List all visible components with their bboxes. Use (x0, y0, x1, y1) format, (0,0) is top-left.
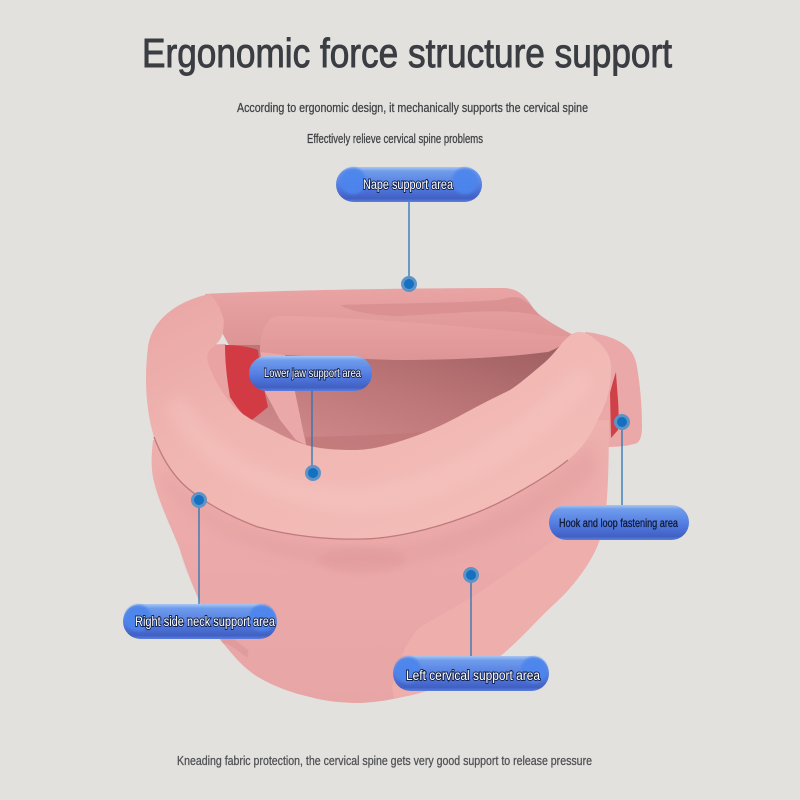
fabric ripple under roll (318, 547, 406, 573)
callout: lower jaw support area: Lower jaw support area (264, 366, 361, 380)
lower body (152, 420, 609, 703)
bottom caption: Kneading fabric protection, the cervical spine gets very good support to release pressure (177, 754, 592, 768)
title: Ergonomic force structure support (142, 30, 673, 76)
right strap with hook and loop (585, 332, 642, 447)
callout: right side neck support area (123, 492, 277, 639)
front roll (146, 294, 611, 539)
left inner wall (200, 344, 280, 440)
roll inner highlight (175, 375, 585, 500)
cavity lower band (306, 432, 423, 452)
inner top strap (260, 316, 570, 360)
inner side strap (260, 350, 306, 445)
interior cavity (200, 340, 575, 460)
callout: left cervical support area (393, 567, 549, 691)
roll lower shadow edge (154, 437, 568, 539)
back band (205, 288, 575, 365)
red velcro (225, 345, 268, 420)
product: pink cervical collar (146, 288, 642, 703)
left crease (179, 547, 248, 658)
body shadow under roll (160, 440, 600, 565)
callout: right side neck support area: Right side neck support area (135, 614, 275, 629)
callout: hook and loop fastening area: Hook and loop fastening area (559, 516, 678, 530)
callout: nape support area: Nape support area (363, 177, 453, 192)
subtitle line 2: Effectively relieve cervical spine problems (307, 132, 483, 146)
lower right lobe (392, 485, 606, 698)
subtitle line 1: According to ergonomic design, it mechanically supports the cervical spine (237, 101, 588, 115)
callout: hook and loop fastening area (549, 414, 689, 540)
callout: nape support area (336, 166, 482, 292)
back band fold (340, 297, 540, 316)
callout: left cervical support area: Left cervical support area (406, 668, 540, 683)
callout: lower jaw support area (249, 356, 372, 481)
